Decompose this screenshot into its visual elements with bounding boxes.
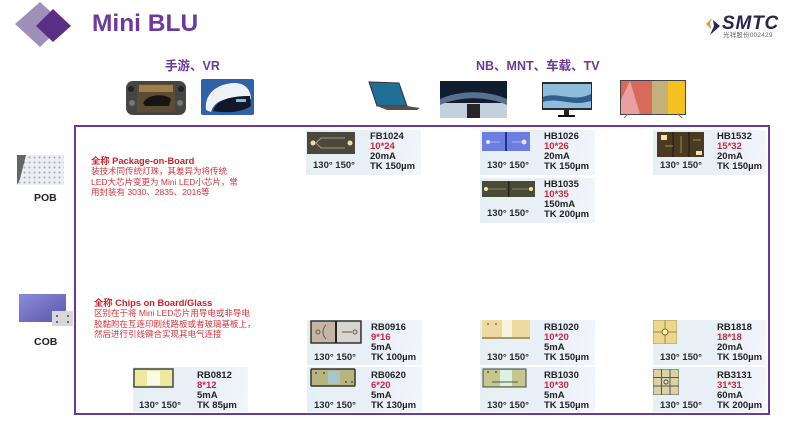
specs: RB0916: TK 100µm — [371, 352, 416, 363]
card: RB0620: 130° 150° — [314, 400, 356, 411]
card: HB1532: 130° 150° — [660, 160, 702, 171]
specs: FB1024: TK 150µm — [370, 161, 415, 172]
specs: RB1030: 10*30 — [544, 380, 569, 391]
specs: RB1030: RB1030 5mA — [544, 370, 579, 401]
card: FB1024 — [306, 130, 421, 174]
label: COB: COB — [34, 336, 57, 348]
icon: POB panel — [17, 155, 64, 185]
specs: RB3131: 31*31 — [717, 380, 742, 391]
card: RB3131: 130° 150° — [660, 400, 702, 411]
icon: SMTC mark — [706, 17, 720, 35]
specs: RB1020 — [544, 322, 589, 363]
text block: POB description — [91, 156, 238, 197]
specs: FB1024: FB1024 20mA — [370, 131, 404, 162]
specs: FB1024 — [370, 131, 415, 172]
specs: RB1020: RB1020 5mA — [544, 322, 579, 353]
specs: HB1026: HB1026 20mA — [544, 131, 579, 162]
specs: RB0916: RB0916 5mA — [371, 322, 406, 353]
text block: POB description: 用封装有 3030、2835、2016等 — [91, 187, 210, 197]
specs: HB1035: 10*35 — [544, 189, 569, 200]
text block: POB description: 全称 Package-on-Board — [91, 156, 194, 166]
chip: RB0916 — [310, 320, 362, 344]
text block: COB description: 胶黏附在互连印刷线路板或者玻璃基板上， — [94, 319, 256, 329]
label: POB: POB — [34, 192, 57, 204]
specs: HB1532: 15*32 — [717, 141, 742, 152]
specs: RB0812 — [197, 370, 237, 411]
card: HB1532 — [653, 130, 766, 174]
heading: NB MNT vehicle TV: NB、MNT、车载、TV — [476, 59, 600, 73]
chip: RB1818 — [653, 320, 677, 344]
specs: FB1024: 10*24 — [370, 141, 395, 152]
specs: RB1020: 10*20 — [544, 332, 569, 343]
specs: RB1818: 18*18 — [717, 332, 742, 343]
card: RB1030 — [480, 367, 595, 412]
card: RB0916: 130° 150° — [314, 352, 356, 363]
specs: RB3131: RB3131 60mA — [717, 370, 752, 401]
specs: RB0812: 8*12 — [197, 380, 217, 391]
chip: RB3131 — [653, 369, 679, 395]
panel: product frame — [74, 125, 770, 415]
card: HB1026: 130° 150° — [487, 160, 529, 171]
card: RB1818 — [653, 320, 766, 364]
chip: HB1035 — [482, 181, 535, 197]
specs: HB1026 — [544, 131, 589, 172]
chip: RB0812 — [133, 368, 174, 388]
specs: RB3131: TK 200µm — [717, 400, 762, 411]
text block: COB description — [94, 298, 256, 339]
icon: car dashboard — [440, 81, 507, 118]
card: RB1818: 130° 150° — [660, 352, 702, 363]
specs: RB1818: RB1818 20mA — [717, 322, 752, 353]
SMTC wordmark: SMTC — [722, 13, 779, 34]
specs: HB1035 — [544, 179, 589, 220]
card: RB0620 — [307, 367, 422, 412]
specs: HB1532: HB1532 20mA — [717, 131, 752, 162]
logo diamonds — [15, 2, 71, 47]
card: HB1035: 130° 150° — [487, 208, 529, 219]
text block: POB description: LED大芯片变更为 Mini LED小芯片，常 — [91, 177, 238, 187]
specs: RB0620: RB0620 5mA — [371, 370, 406, 401]
card: FB1024: 130° 150° — [313, 160, 355, 171]
specs: HB1026: TK 150µm — [544, 161, 589, 172]
specs: RB0916 — [371, 322, 416, 363]
stock code: 光祥股份002429 — [723, 32, 773, 39]
text block: COB description: 然后进行引线键合实现其电气连接 — [94, 329, 222, 339]
card: RB0916 — [307, 320, 422, 364]
brand logo: SMTC — [706, 13, 779, 39]
icon: monitor — [542, 82, 592, 117]
chip: FB1024 — [307, 132, 355, 154]
text block: COB description: 全称 Chips on Board/Glass — [94, 298, 212, 308]
card: HB1026 — [480, 130, 595, 174]
chip: HB1532 — [657, 132, 704, 157]
specs: HB1035: TK 200µm — [544, 209, 589, 220]
chip: RB0620 — [310, 368, 356, 387]
specs: RB1030 — [544, 370, 589, 411]
specs: RB1818 — [717, 322, 762, 363]
specs: HB1026: 10*26 — [544, 141, 569, 152]
specs: RB0916: 9*16 — [371, 332, 391, 343]
icon: laptop — [368, 82, 420, 110]
text block: POB description: 装技术同传统灯珠，其差异为将传统 — [91, 166, 227, 176]
card: RB1030: 130° 150° — [487, 400, 529, 411]
heading: handheld and VR: 手游、VR — [165, 59, 220, 73]
icon: COB panel — [19, 294, 73, 326]
specs: RB0620 — [371, 370, 416, 411]
card: RB0812 — [133, 367, 248, 412]
card: RB3131 — [653, 367, 766, 412]
specs: RB0620: TK 130µm — [371, 400, 416, 411]
specs: RB1030: TK 150µm — [544, 400, 589, 411]
card: HB1035 — [480, 178, 595, 222]
specs: HB1532: TK 150µm — [717, 161, 762, 172]
specs: RB1818: TK 150µm — [717, 352, 762, 363]
card: RB0812: 130° 150° — [139, 400, 181, 411]
chip: HB1026 — [482, 132, 530, 151]
icon: VR headset — [201, 79, 254, 115]
card: RB1020 — [480, 320, 595, 364]
chip: RB1030 — [482, 368, 526, 388]
specs: RB0812: RB0812 5mA — [197, 370, 232, 401]
card: RB1020: 130° 150° — [487, 352, 529, 363]
icon: handheld console — [126, 81, 186, 115]
specs: HB1035: HB1035 150mA — [544, 179, 579, 210]
icon: television — [620, 80, 686, 118]
chip: RB1020 — [482, 320, 530, 339]
specs: RB0620: 6*20 — [371, 380, 391, 391]
title: Mini BLU — [92, 10, 198, 37]
specs: HB1532 — [717, 131, 762, 172]
text block: COB description: 区别在于将 Mini LED芯片用导电或非导电 — [94, 308, 250, 318]
specs: RB0812: TK 85µm — [197, 400, 237, 411]
specs: RB1020: TK 150µm — [544, 352, 589, 363]
specs: RB3131 — [717, 370, 762, 411]
